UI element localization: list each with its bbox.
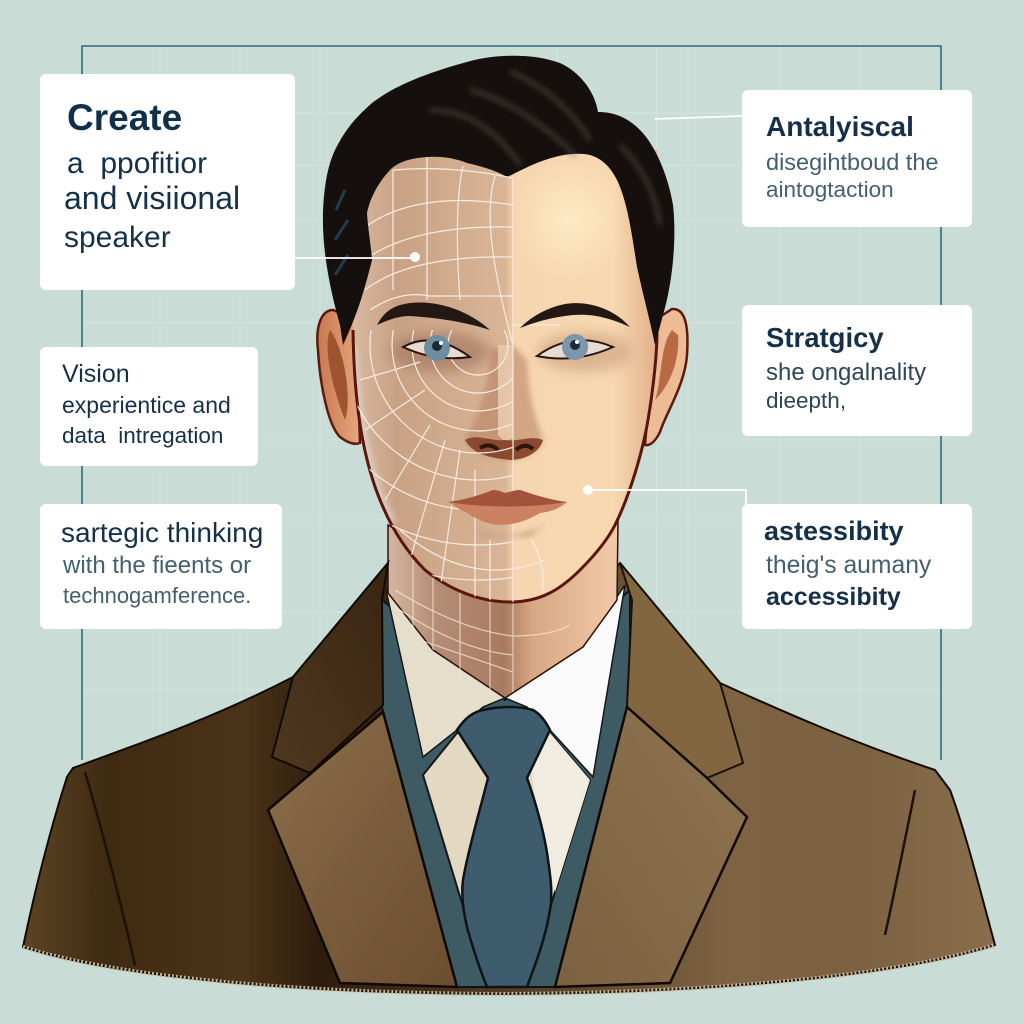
face outline bbox=[353, 330, 657, 602]
callout: strategic thinking bbox=[40, 504, 282, 629]
jacket body bbox=[23, 563, 995, 994]
face bbox=[353, 150, 657, 602]
callout: create: and visiional bbox=[64, 180, 240, 216]
hair highlights bbox=[430, 72, 660, 225]
left upper lapel bbox=[272, 563, 388, 773]
collars bbox=[386, 585, 625, 777]
callout: strategy: Stratgicy bbox=[766, 322, 884, 353]
vest bands bbox=[380, 590, 630, 987]
callout: accessibility bbox=[742, 504, 972, 629]
right lower lapel bbox=[555, 707, 747, 987]
callout: strategy: she ongalnality bbox=[766, 359, 926, 386]
callout: create: Create bbox=[67, 97, 182, 138]
nose shading bbox=[465, 345, 543, 460]
nose bridge bbox=[498, 345, 513, 442]
callout: analytical bbox=[742, 90, 972, 227]
callout: vision: experientice and bbox=[62, 392, 231, 418]
callout: vision: Vision bbox=[62, 360, 130, 388]
left lower lapel bbox=[268, 712, 457, 987]
callout: create: a ppofitior bbox=[67, 147, 207, 180]
ears bbox=[317, 309, 687, 445]
nose base bbox=[465, 437, 543, 460]
callout: vision bbox=[40, 347, 258, 466]
jacket fuzzy hem bbox=[23, 945, 995, 994]
shirt front bbox=[423, 733, 590, 985]
callout: create: speaker bbox=[64, 221, 171, 254]
left eye bbox=[403, 335, 470, 361]
hair bbox=[323, 56, 674, 345]
neck bbox=[388, 520, 618, 698]
callout: vision: data intregation bbox=[62, 423, 223, 448]
callout: strategic thinking: sartegic thinking bbox=[61, 517, 263, 548]
callout: analytical: disegihtboud the bbox=[766, 149, 938, 175]
forehead glow bbox=[515, 160, 625, 280]
callout: strategy bbox=[742, 305, 972, 436]
eye sockets bbox=[390, 332, 633, 372]
callout: analytical: aintogtaction bbox=[766, 177, 894, 202]
callout: analytical: Antalyiscal bbox=[766, 111, 914, 142]
connector lines bbox=[295, 116, 746, 505]
frame bbox=[82, 46, 941, 760]
jacket seams bbox=[85, 772, 915, 965]
callout: strategy: dieepth, bbox=[766, 388, 846, 413]
callout: accessibility: theig's aumany bbox=[766, 552, 931, 579]
callout: strategic thinking: technogamference. bbox=[63, 583, 251, 608]
callout: accessibility: accessibity bbox=[766, 583, 901, 611]
right eye bbox=[537, 334, 613, 360]
cheek highlight bbox=[352, 345, 392, 522]
callout: accessibility: astessibity bbox=[764, 516, 904, 546]
eyebrows bbox=[377, 303, 630, 330]
neck mesh bbox=[395, 560, 570, 695]
connector dots bbox=[410, 252, 593, 495]
callout: create bbox=[40, 74, 295, 290]
callout: strategic thinking: with the fieents or bbox=[63, 552, 251, 579]
face mesh bbox=[357, 157, 560, 602]
right upper lapel bbox=[620, 563, 743, 778]
nostrils bbox=[480, 445, 533, 450]
mouth bbox=[448, 490, 567, 537]
tie bbox=[457, 707, 551, 987]
